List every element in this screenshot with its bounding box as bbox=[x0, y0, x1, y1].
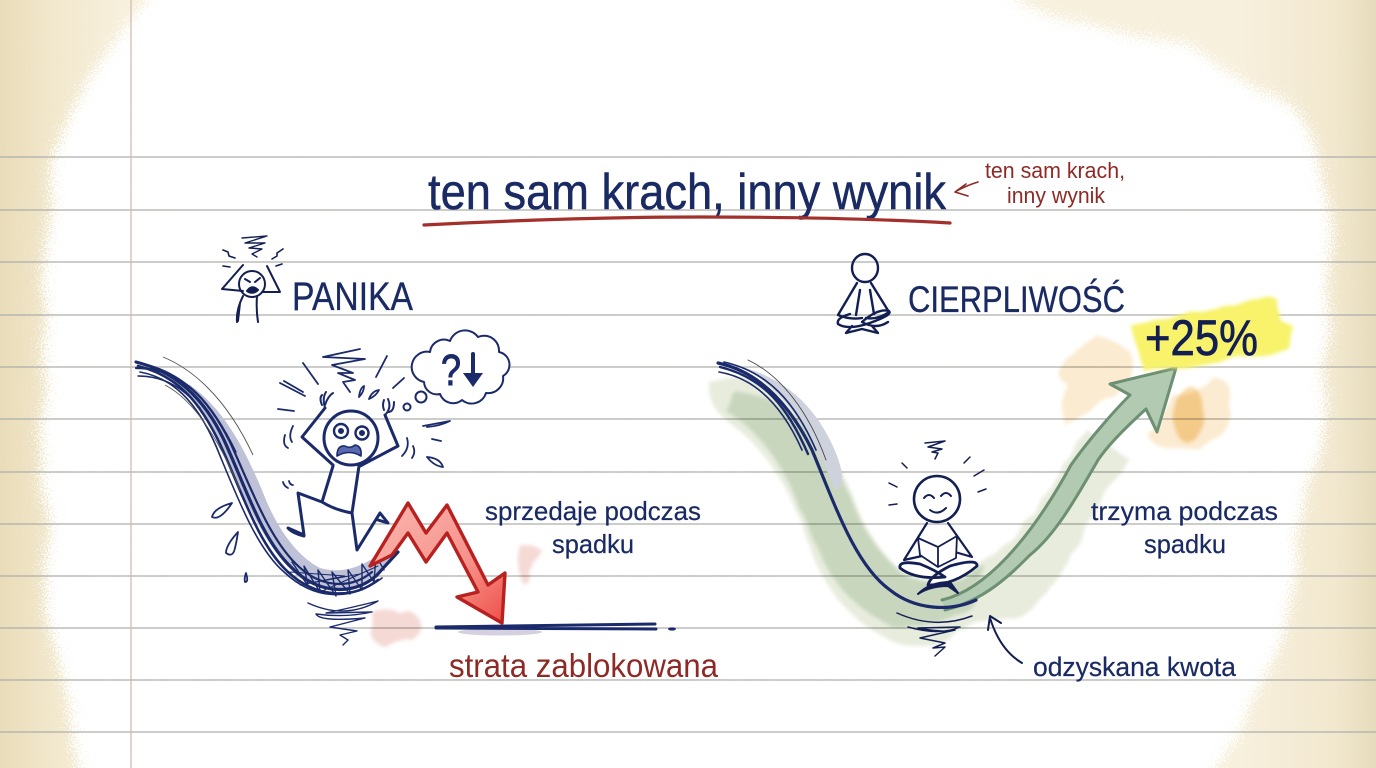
title side note: ten sam krach, bbox=[985, 158, 1125, 183]
label: sells during the drop bbox=[485, 496, 701, 559]
title underline bbox=[424, 217, 950, 225]
title side note: inny wynik bbox=[1007, 183, 1106, 208]
icon: sweat drops bbox=[212, 503, 247, 582]
baseline: locked loss bbox=[436, 624, 676, 636]
label: recovered amount: odzyskana kwota bbox=[1033, 652, 1237, 682]
icon: thought bubble bbox=[404, 330, 509, 410]
title: ten sam krach, inny wynik bbox=[428, 164, 947, 220]
label: holds during the drop bbox=[1091, 496, 1278, 559]
chart: falling curve bbox=[136, 357, 398, 596]
icon: impact scribble bbox=[308, 601, 378, 645]
label: sells during the drop: spadku bbox=[552, 529, 634, 559]
icon: calm figure reading bbox=[900, 476, 977, 594]
heading: panika: PANIKA bbox=[292, 275, 413, 319]
icon: panicking head bbox=[222, 236, 283, 322]
arrow: green recovery bbox=[942, 368, 1176, 610]
icon: calm marks bbox=[889, 441, 986, 656]
panel: cierpliwosc bbox=[710, 254, 1292, 682]
icon: panicking figure bbox=[288, 392, 398, 550]
icon: stress scribble and motion marks bbox=[278, 349, 450, 488]
highlighter: yellow bbox=[1130, 298, 1292, 372]
stain: right red wash bbox=[519, 545, 543, 583]
arrow: recovered amount pointer bbox=[988, 616, 1022, 663]
heading: cierpliwosc: CIERPLIWOŚĆ bbox=[908, 278, 1125, 320]
stat: plus 25 percent: +25% bbox=[1145, 310, 1258, 366]
wash: orange left bbox=[1058, 334, 1132, 425]
icon: meditating figure bbox=[838, 254, 890, 333]
title side note bbox=[955, 158, 1125, 208]
panel: panika bbox=[136, 236, 719, 684]
chart: patient curve bbox=[718, 360, 976, 607]
icon: thought bubble: ? bbox=[441, 346, 461, 395]
label: sells during the drop: sprzedaje podczas bbox=[485, 496, 701, 526]
wash: orange right bbox=[1146, 378, 1231, 450]
label: holds during the drop: trzyma podczas bbox=[1091, 496, 1278, 526]
label: holds during the drop: spadku bbox=[1144, 529, 1226, 559]
arrow: red decline bbox=[370, 503, 505, 623]
label: locked loss: strata zablokowana bbox=[449, 647, 719, 684]
stain: left red wash bbox=[371, 609, 421, 647]
wash: green band bbox=[710, 377, 1130, 646]
